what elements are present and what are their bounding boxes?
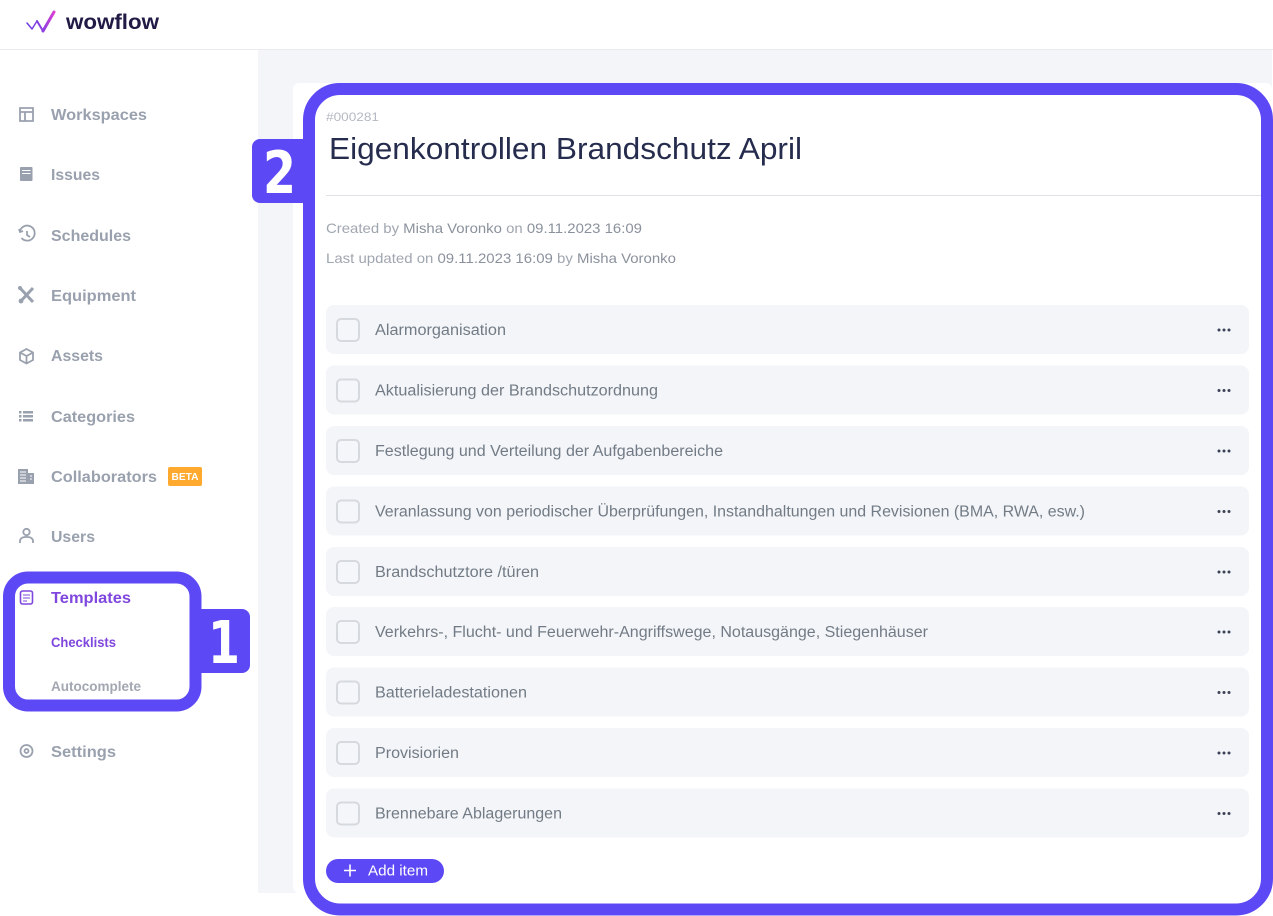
- highlight frame 1: templates menu: [9, 578, 250, 706]
- nav item: Equipment: Equipment: [51, 288, 137, 305]
- card panel: checklist template: [293, 83, 1273, 916]
- nav item: Settings: [20, 744, 116, 761]
- item: Provisiorien: Provisiorien: [375, 745, 459, 762]
- nav item: Collaborators with beta tag: [18, 467, 202, 486]
- last updated line: Last updated on 09.11.2023 16:09 by Misha Voronko: [326, 250, 676, 266]
- item: Provisiorien: [326, 728, 1249, 777]
- checklist items: [326, 305, 1249, 838]
- nav item: Assets: [20, 348, 103, 365]
- nav item: Users: Users: [51, 529, 95, 546]
- badge: number 2: 2: [263, 138, 296, 207]
- item: Verkehrs-, Flucht- und Feuerwehr-Angriffswege: [326, 607, 1249, 656]
- nav item: Issues: [20, 167, 100, 184]
- item: Verkehrs-, Flucht- und Feuerwehr-Angriffswege: Verkehrs-, Flucht- und Feuerwehr-Angriffswege, Notausgänge, Stiegenhäuser: [375, 624, 928, 641]
- header bar: [0, 0, 1273, 50]
- item: Festlegung und Verteilung der Aufgabenbereiche: [326, 426, 1249, 475]
- item: Brandschutztore /türen: [326, 547, 1249, 596]
- nav item: Schedules: [19, 226, 131, 245]
- badge: BETA: BETA: [172, 472, 198, 483]
- nav item: Issues: Issues: [51, 167, 100, 184]
- item: Aktualisierung der Brandschutzordnung: [326, 366, 1249, 414]
- created by line: Created by Misha Voronko on 09.11.2023 16:09: [326, 220, 642, 236]
- nav item: Schedules: Schedules: [51, 228, 131, 245]
- item: Batterieladestationen: Batterieladestationen: [375, 684, 527, 702]
- badge: number 1: 1: [208, 608, 240, 677]
- nav item: Users: [20, 529, 95, 546]
- badge: BETA: [168, 467, 202, 486]
- item: Batterieladestationen: [326, 668, 1249, 716]
- nav item: Settings: Settings: [51, 744, 116, 761]
- nav item: Workspaces: Workspaces: [51, 107, 147, 124]
- highlight frame 2: checklist content: [252, 89, 1267, 910]
- icon: wowflow logo: [27, 12, 54, 31]
- template title: Eigenkontrollen Brandschutz April: [329, 131, 802, 166]
- button: Add item: [326, 859, 444, 883]
- sidebar navigation: [18, 107, 202, 761]
- brand name: wowflow: [65, 11, 160, 34]
- nav sub-item: Autocomplete: Autocomplete: [51, 678, 141, 694]
- nav item: Categories: Categories: [51, 409, 135, 426]
- item: Festlegung und Verteilung der Aufgabenbereiche: Festlegung und Verteilung der Aufgabenbereiche: [375, 443, 723, 460]
- nav sub-item: Checklists: Checklists: [51, 634, 116, 650]
- item: Brennebare Ablagerungen: Brennebare Ablagerungen: [375, 806, 562, 822]
- button: Add item: Add item: [368, 864, 428, 880]
- item: Aktualisierung der Brandschutzordnung: Aktualisierung der Brandschutzordnung: [375, 382, 658, 400]
- nav item: Collaborators with beta tag: Collaborators: [51, 469, 157, 486]
- item: Alarmorganisation: [326, 305, 1249, 354]
- nav item: Templates: Templates: [51, 590, 131, 607]
- item: Veranlassung von periodischer Überprüfungen: [326, 486, 1249, 536]
- item: Veranlassung von periodischer Überprüfungen: Veranlassung von periodischer Überprüfungen, Instandhaltungen und Revisionen (BMA, RWA, esw.): [375, 502, 1085, 520]
- template id: #000281: [326, 110, 379, 124]
- content background: [258, 50, 1272, 893]
- item: Brennebare Ablagerungen: [326, 788, 1249, 838]
- nav item: Assets: Assets: [51, 348, 103, 365]
- nav item: Equipment: [18, 286, 137, 305]
- item: Brandschutztore /türen: Brandschutztore /türen: [375, 564, 539, 581]
- item: Alarmorganisation: Alarmorganisation: [375, 322, 506, 339]
